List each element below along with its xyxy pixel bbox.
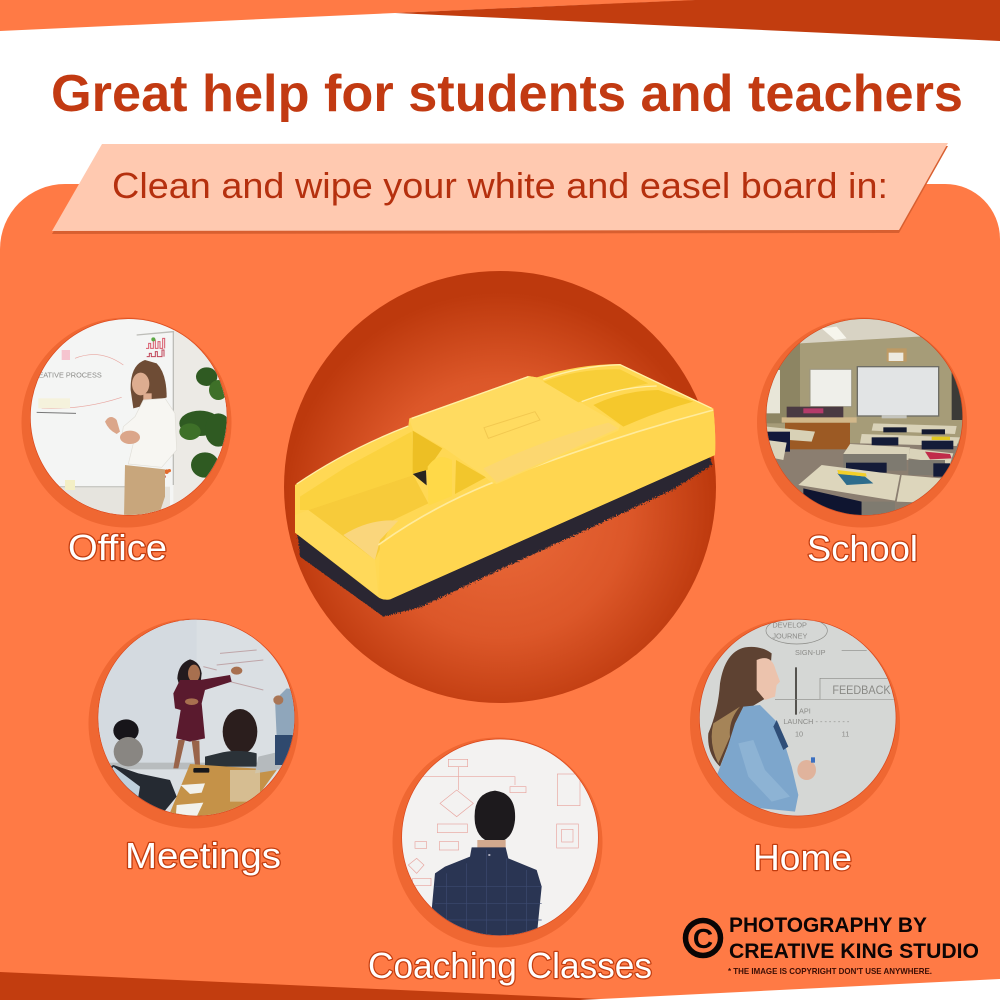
- teacher desk: [785, 423, 850, 449]
- home halo: [690, 618, 900, 828]
- woman: [131, 360, 167, 408]
- meetings halo: [88, 618, 298, 828]
- cavity floor: [308, 475, 428, 560]
- denim jacket: [715, 705, 798, 812]
- photo: home: [698, 617, 898, 818]
- central circle: [284, 271, 716, 703]
- office halo: [22, 318, 232, 528]
- photo: home: DEVELOP: [772, 620, 807, 629]
- copyright notice: * THE IMAGE IS COPYRIGHT DON'T USE ANYWHERE.: [728, 966, 932, 976]
- photo: home: LAUNCH - - - - - - - -: [783, 717, 850, 726]
- school halo: [757, 318, 967, 528]
- top dark ribbon: [395, 0, 1000, 41]
- front face highlight: [378, 410, 713, 545]
- coaching label: Coaching Classes: [368, 945, 652, 986]
- coaching classes circle group: [368, 738, 652, 986]
- subtitle text: Clean and wipe your white and easel board in:: [112, 165, 888, 206]
- peg: [428, 457, 452, 506]
- photo: home: API: [799, 706, 811, 715]
- felt pad: [297, 455, 712, 617]
- rows of desks: [872, 423, 957, 434]
- body: [295, 364, 715, 600]
- copyright icon: [686, 920, 720, 956]
- school label: School: [807, 528, 918, 569]
- photo: meeting: [97, 618, 298, 818]
- copyright icon: C: [693, 923, 713, 954]
- front face: [378, 410, 715, 600]
- seated woman: [223, 709, 257, 754]
- photo: home: FEEDBACK: [832, 683, 891, 697]
- school circle group: [757, 317, 968, 569]
- photo: home: JOURNEY: [772, 631, 807, 640]
- left end wall: [295, 510, 378, 596]
- credit line one: PHOTOGRAPHY BY: [729, 914, 927, 937]
- top sliding block: [409, 376, 620, 484]
- man at right: [275, 688, 294, 736]
- bottom dark ribbon: [0, 972, 600, 1000]
- dark gap: [413, 470, 427, 485]
- photography credit: [686, 914, 979, 976]
- rim highlights: [297, 365, 712, 484]
- photo: home: SIGN-UP: [795, 648, 826, 657]
- left cavity wall: [300, 432, 413, 510]
- rear compartment two: [593, 390, 693, 427]
- photo: office: [27, 317, 233, 520]
- rear compartment one: [543, 369, 648, 402]
- meetings label: Meetings: [125, 835, 281, 876]
- top orange ribbon: [0, 0, 700, 31]
- product: yellow whiteboard eraser: [295, 364, 715, 617]
- photo: coaching: [400, 738, 600, 938]
- photo: home: 11: [842, 730, 849, 739]
- man from behind: [475, 791, 515, 843]
- hair: [708, 647, 772, 767]
- bottom white corner: [580, 979, 1000, 1000]
- photo: home: 10: [795, 730, 803, 739]
- seated men: [113, 719, 139, 742]
- woman presenter: [177, 659, 202, 683]
- home label: Home: [753, 837, 852, 878]
- coaching halo: [392, 738, 602, 948]
- side desks: [767, 427, 815, 442]
- office circle group: [22, 317, 233, 568]
- table: [168, 764, 277, 817]
- plant: [179, 367, 232, 478]
- logo emboss: [484, 412, 540, 438]
- credit line two: CREATIVE KING STUDIO: [729, 940, 979, 963]
- home circle group: [690, 617, 900, 878]
- rear wall of cavity: [413, 431, 442, 473]
- title: Great help for students and teachers: [51, 65, 963, 123]
- office label: Office: [68, 527, 167, 568]
- photo: school classroom: [763, 317, 968, 520]
- subtitle banner: [52, 143, 948, 234]
- floor reflection: [343, 520, 398, 560]
- meetings circle group: [88, 618, 298, 876]
- photo: office: EATIVE PROCESS: [38, 370, 102, 379]
- face: [757, 658, 780, 700]
